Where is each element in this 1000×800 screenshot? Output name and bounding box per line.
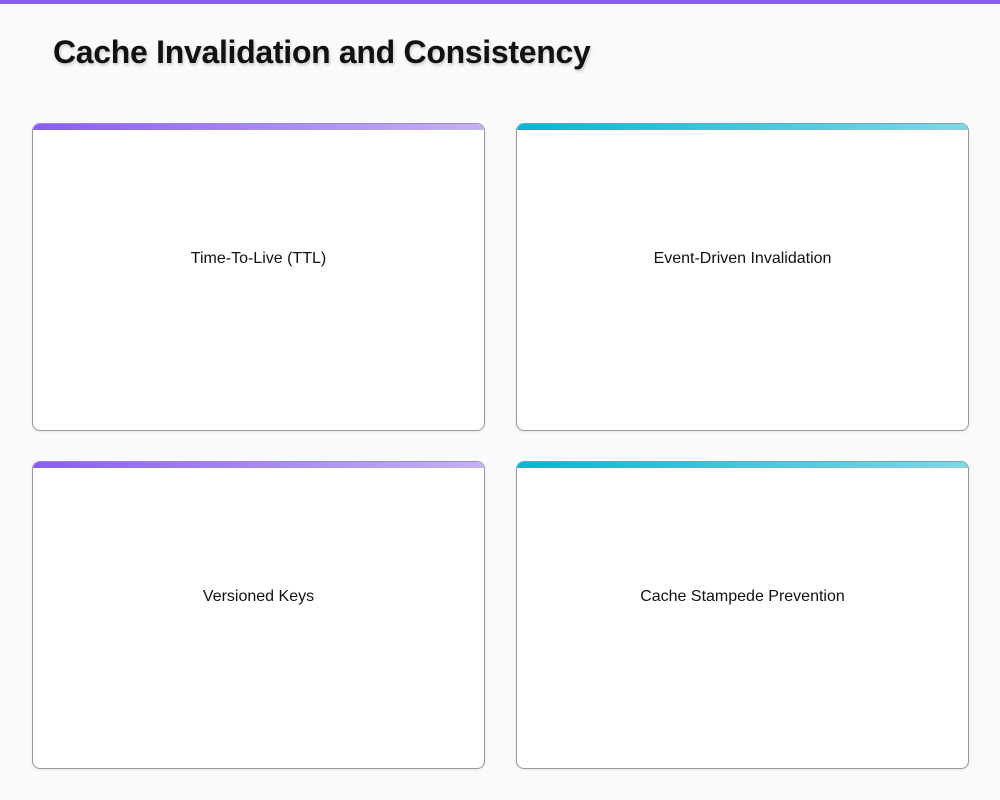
title: Cache Invalidation and Consistency [53,34,590,70]
panel: event-driven [516,123,969,431]
panel: ttl [32,123,485,431]
label: ttl: Time-To-Live (TTL) [191,250,326,267]
label: versioned keys: Versioned Keys [203,588,314,605]
label: event-driven: Event-Driven Invalidation [654,250,831,267]
panel: versioned keys [32,461,485,769]
panel: stampede [516,461,969,769]
label: stampede: Cache Stampede Prevention [640,588,845,605]
